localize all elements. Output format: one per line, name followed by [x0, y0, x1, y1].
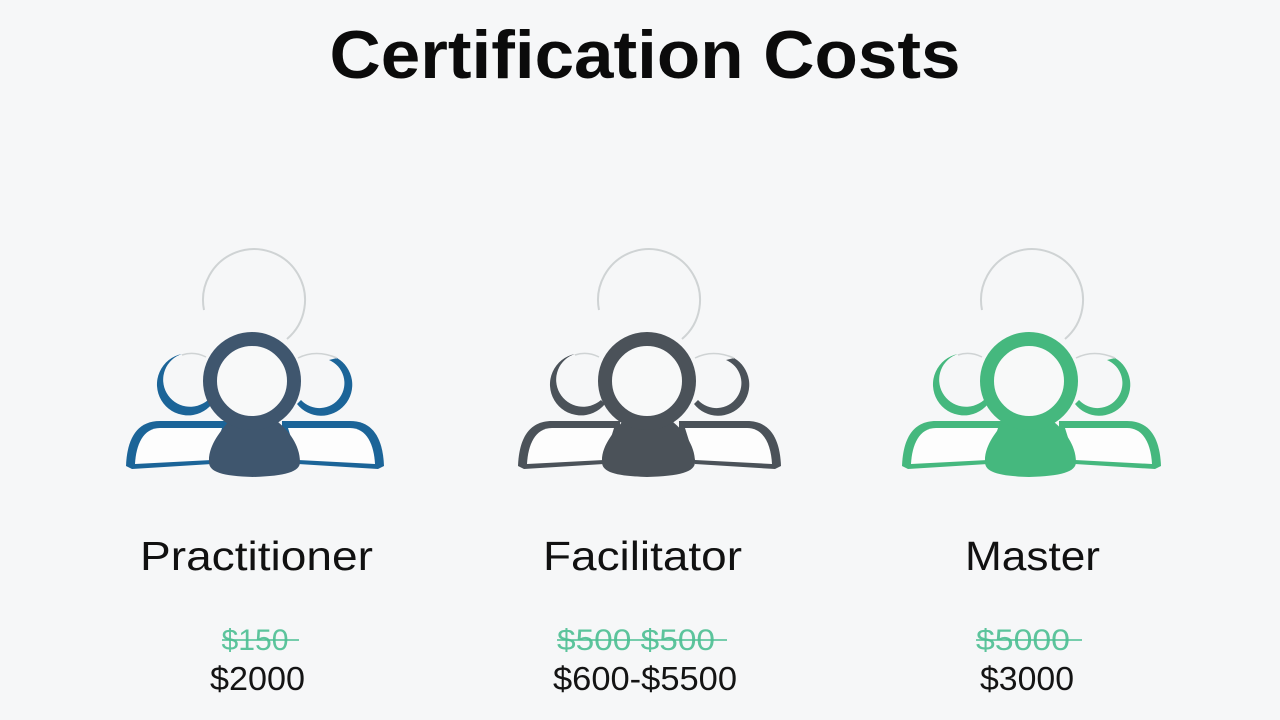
icon: facilitator group [518, 249, 781, 477]
old price: master: $5000 [976, 624, 1070, 657]
panel: practitioner [126, 249, 384, 697]
price: facilitator: $600-$5500 [553, 660, 737, 697]
icon: practitioner group [126, 249, 384, 477]
label: facilitator: Facilitator [543, 533, 742, 579]
price: practitioner: $2000 [210, 660, 305, 697]
icon: master group [902, 249, 1161, 477]
price: master: $3000 [980, 660, 1074, 697]
panel: master [902, 249, 1161, 697]
old price: facilitator: $500 $500 [557, 624, 715, 657]
title: Certification Costs [330, 17, 960, 93]
panel: facilitator [518, 249, 781, 697]
old price: practitioner: $150 [222, 624, 288, 657]
label: master: Master [965, 533, 1100, 579]
label: practitioner: Practitioner [140, 533, 373, 579]
